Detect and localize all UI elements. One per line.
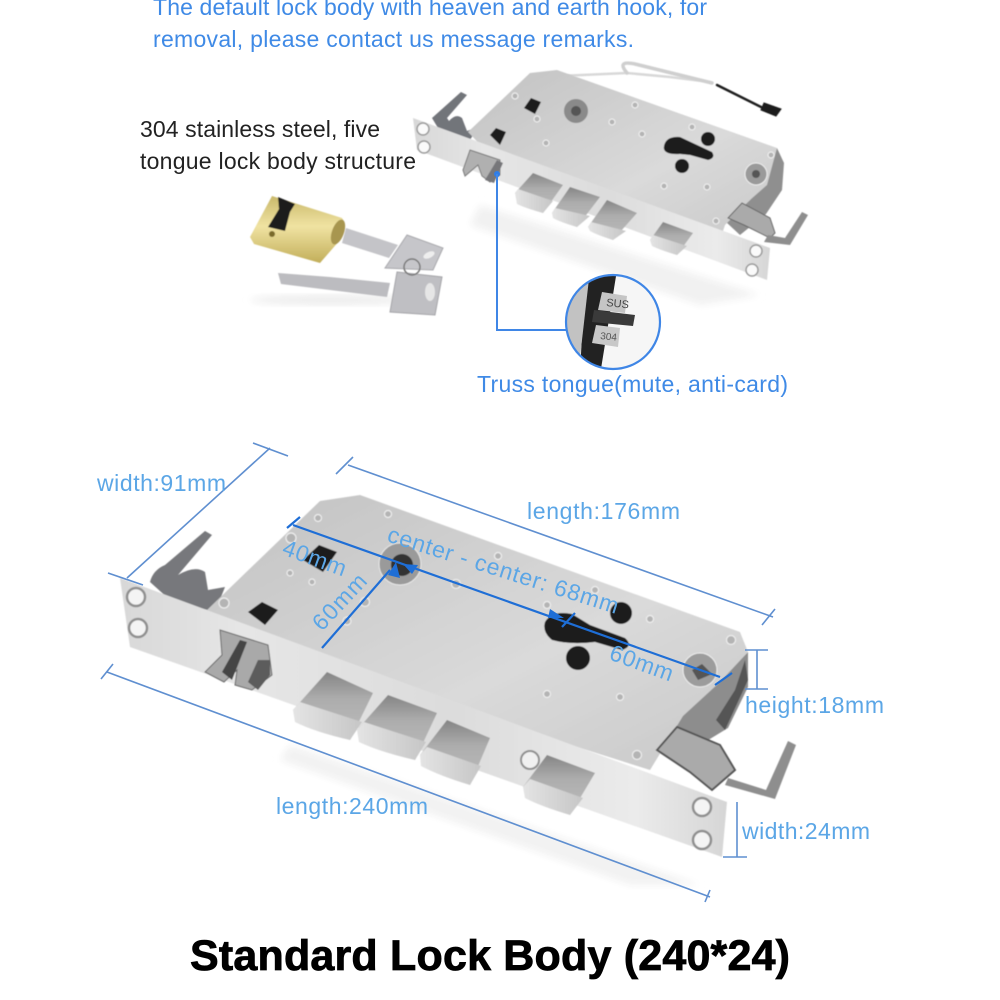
bolts (293, 672, 373, 740)
dimension: length 240mm (101, 664, 710, 902)
dimension: length 240mm: length:240mm (276, 793, 428, 819)
center to center dimensions: center - center: 68mm (384, 521, 622, 619)
dimension: height 18mm: height:18mm (745, 692, 884, 718)
shadow (470, 205, 760, 305)
intro note: removal, please contact us message remarks. (153, 26, 634, 52)
truss tongue pointer (494, 171, 566, 330)
dimension: length 176mm: length:176mm (527, 498, 680, 524)
center to center dimensions: 60mm (606, 639, 677, 686)
center to center dimensions: 60mm (307, 568, 372, 635)
plate (205, 495, 748, 770)
truss tongue detail circle: 304 (600, 331, 618, 344)
center to center dimensions (279, 517, 732, 686)
material note: 304 stainless steel, five (140, 116, 380, 142)
plate details (524, 98, 541, 114)
latch (205, 630, 272, 690)
latch right (657, 727, 735, 790)
faceplate (413, 118, 770, 280)
lower lock body (120, 495, 796, 885)
latch right (728, 203, 775, 238)
dimension: width 24mm: width:24mm (741, 818, 870, 844)
plate (468, 70, 777, 240)
cylinder and keys (250, 196, 443, 315)
truss tongue detail circle: SUS (606, 297, 629, 311)
center to center dimensions: 40mm (279, 534, 350, 581)
cable (560, 63, 781, 116)
bolts (515, 173, 563, 213)
plate details (303, 545, 337, 572)
dimension: width 91mm (96, 443, 288, 585)
material note (140, 116, 416, 174)
shadows (280, 745, 700, 885)
truss tongue label: Truss tongue(mute, anti-card) (477, 371, 788, 397)
side (670, 652, 748, 745)
top lock body (413, 70, 808, 305)
material note: tongue lock body structure (140, 148, 416, 174)
intro note (153, 0, 707, 52)
dimension: length 176mm (336, 457, 775, 625)
dimension: height 18mm (745, 650, 884, 718)
truss tongue detail circle (564, 274, 662, 370)
side (726, 148, 784, 235)
hook left (432, 92, 478, 140)
latch (463, 150, 500, 182)
faceplate (120, 578, 727, 857)
title: Standard Lock Body (240*24) (190, 932, 790, 980)
dimension: width 91mm: width:91mm (96, 470, 226, 496)
hook left (150, 531, 225, 612)
